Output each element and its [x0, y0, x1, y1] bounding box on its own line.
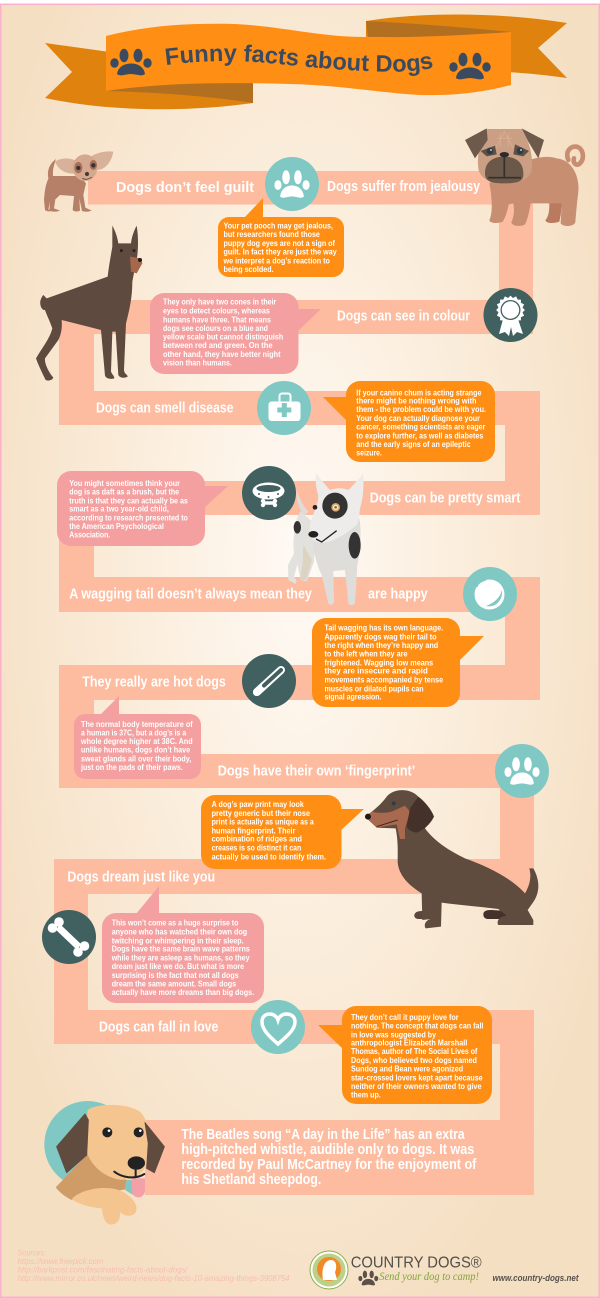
Beatles fact	[181, 1127, 477, 1188]
bubble: hot dogs: just on the pads of their paws.	[80, 763, 183, 772]
dog: doberman	[36, 226, 142, 381]
bubble: guilt: Your pet pooch may get jealous,	[224, 222, 333, 230]
bubble: guilt: being scolded.	[224, 265, 274, 274]
icon: heart badge	[251, 1000, 305, 1054]
bubble: fingerprint: A dog’s paw print may look	[212, 800, 304, 809]
bubble: colour vision: They only have two cones in their	[163, 298, 276, 307]
bubble: fingerprint: human fingerprint. Their	[212, 826, 295, 835]
bubble: smell disease: to explore further, as well as diabetes	[356, 431, 484, 440]
bubble: hot dogs: sweat glands all over their body,	[81, 754, 191, 763]
Beatles fact: his Shetland sheepdog.	[181, 1172, 321, 1188]
bubble: colour vision: other hand, they have better night	[163, 350, 281, 359]
icon: right paw	[449, 53, 491, 79]
bubble: hot dogs: unlike humans, dogs don’t have	[81, 746, 191, 755]
heading: wagging tail: A wagging tail doesn’t always mean they	[69, 586, 312, 602]
dog: puppy portrait	[44, 1101, 164, 1225]
bubble: colour vision: dogs see colours on a blue and	[163, 324, 268, 333]
dog: pug	[465, 128, 583, 226]
bubble: dreams: dream the same amount. Small dogs	[112, 979, 237, 988]
heading: are happy: are happy	[368, 586, 428, 602]
bubble: guilt: puppy dog eyes are not a sign of	[224, 239, 335, 248]
bubble: guilt	[218, 198, 344, 277]
heading: colour: Dogs can see in colour	[337, 308, 470, 324]
dog: chihuahua	[44, 151, 113, 212]
bubble: dreams: anyone who has watched their own dog	[112, 928, 247, 937]
bubble: tail wagging	[312, 618, 484, 707]
icon: left paw	[110, 49, 152, 75]
bubble: dreams: actually have more dreams than big dogs.	[112, 988, 254, 997]
bubble: dreams: while they are asleep as humans, so they	[111, 954, 250, 963]
heading: fingerprint: Dogs have their own ‘fingerprint’	[218, 764, 415, 780]
bubble: love: neither of their owners wanted to give	[351, 1082, 482, 1091]
Beatles fact: high-pitched whistle, audible only to dogs. It was	[181, 1142, 474, 1158]
bubble: fingerprint: creases is so distinct it can	[212, 843, 301, 852]
bubble: colour vision: humans have three. That means	[163, 315, 271, 324]
bubble: dreams: Dogs have the same brain wave patterns	[112, 945, 250, 954]
bubble: hot dogs	[74, 696, 201, 779]
winding path	[54, 171, 540, 1195]
bubble: guilt: guilt. In fact they are just the way	[224, 248, 337, 257]
bubble: dreams: surprising is the fact that not all dogs	[112, 971, 239, 980]
bubble: hot dogs: The normal body temperature of	[81, 720, 193, 729]
bubble: dreams	[102, 886, 264, 1003]
bubble: smell disease: there might be nothing wrong with	[356, 397, 477, 406]
Beatles fact: The Beatles song “A day in the Life” has an extra	[181, 1127, 465, 1143]
bubble: smell disease: seizure.	[356, 449, 382, 458]
bubble: fingerprint: combination of ridges and	[212, 835, 302, 844]
bubble: dreams: This won’t come as a huge surprise to	[112, 919, 239, 928]
bubble: tail wagging: the right when they’re happy and	[324, 641, 438, 650]
bubble: fingerprint: print is actually as unique as a	[212, 818, 314, 827]
logo name: COUNTRY DOGS®	[351, 1254, 482, 1271]
bubble: tail wagging: Apparently dogs wag their tail to	[324, 632, 437, 641]
heading: guilt: Dogs don’t feel guilt	[116, 180, 254, 196]
bubble: colour vision: eyes to detect colours, whereas	[163, 307, 270, 316]
bubble: love: them up.	[351, 1091, 381, 1100]
title: Funny facts about Dogs	[166, 44, 432, 76]
bubble: love: Thomas, author of The Social Lives of	[351, 1047, 478, 1056]
sources: http://barkpost.com/fascinating-facts-about-dogs/	[18, 1264, 189, 1274]
sources: http://www.mirror.co.uk/news/weird-news/dog-facts-10-amazing-things-3908754	[18, 1273, 290, 1283]
bubble: love: Dogs, who believed two dogs named	[351, 1056, 477, 1065]
bubble: dreams: dream just like we do. But what is more	[112, 962, 245, 971]
bubble: love: anthropologist Elizabeth Marshall	[351, 1039, 467, 1048]
bubble: love: nothing. The concept that dogs can fall	[351, 1021, 483, 1030]
icon: paw badge	[495, 744, 549, 798]
bubble: guilt: we interpret a dog’s reaction to	[223, 256, 330, 265]
sources: Sources:	[18, 1248, 46, 1258]
bubble: smart: truth is that they can actually be as	[69, 496, 188, 505]
bubble: dreams: twitching or whimpering in their sleep.	[112, 936, 244, 945]
title banner	[45, 14, 567, 110]
bubble: fingerprint	[201, 795, 364, 869]
icon: paw badge	[265, 157, 319, 211]
bubble: smell disease: If your canine chum is acting strange	[356, 388, 482, 397]
logo: Country Dogs	[310, 1251, 482, 1289]
icon: bone badge	[42, 910, 96, 964]
bubble: tail wagging: muscles or dilated pupils can	[324, 684, 424, 693]
dog: dachshund	[365, 790, 538, 928]
bubble: love: They don’t call it puppy love for	[351, 1013, 458, 1022]
heading: smart: Dogs can be pretty smart	[370, 490, 521, 506]
bubble: colour vision: between red and green. On the	[163, 341, 273, 350]
bubble: love	[318, 1006, 492, 1104]
logo badge	[310, 1251, 348, 1289]
bubble: smell disease: and the early signs of an epileptic	[356, 440, 471, 449]
icon: ball badge	[463, 567, 517, 621]
bubble: colour vision: yellow scale but cannot distinguish	[163, 333, 283, 342]
bubble: colour vision: vision than humans.	[163, 359, 232, 368]
bubble: tail wagging: they are insecure and rapid	[324, 667, 428, 676]
icon: rosette badge	[484, 288, 538, 342]
bubble: smell disease: them - the problem could be with you.	[356, 405, 486, 414]
heading: love: Dogs can fall in love	[99, 1020, 218, 1036]
heading: disease: Dogs can smell disease	[96, 400, 233, 416]
bubble: fingerprint: actually be used to identify them.	[212, 852, 326, 861]
bubble: smell disease: Your dog can actually diagnose your	[356, 414, 480, 423]
website: www.country-dogs.net	[492, 1273, 579, 1283]
bubble: tail wagging: frightened. Wagging low means	[324, 658, 434, 667]
bubble: tail wagging: to the left when they are	[324, 649, 408, 658]
sources: https://www.freepick.com	[18, 1256, 103, 1266]
bubble: smart: smart as a two year-old child,	[69, 505, 169, 514]
bubble: love: Sundog and Bean were agonized	[351, 1065, 463, 1074]
icon: thermometer badge	[242, 654, 296, 708]
bubble: love: in love was suggested by	[351, 1030, 437, 1039]
bubble: fingerprint: pretty generic but their nose	[212, 809, 311, 818]
bubble: hot dogs: whole degree higher at 38C. And	[80, 737, 193, 746]
bubble: smart: the American Psychological	[69, 522, 164, 531]
Beatles fact: recorded by Paul McCartney for the enjoyment of	[181, 1157, 477, 1173]
heading: hot dogs: They really are hot dogs	[82, 675, 226, 691]
bubble: tail wagging: signal agression.	[324, 693, 382, 702]
bubble: love: star-crossed lovers kept apart because	[351, 1074, 483, 1083]
bubble: guilt: but researchers found those	[224, 230, 320, 239]
bubble: colour vision	[150, 293, 321, 374]
logo tagline: Send your dog to camp!	[379, 1271, 479, 1283]
bubble: tail wagging: Tail wagging has its own language.	[324, 623, 443, 632]
icon: collar badge	[242, 466, 296, 520]
bubble: smart: You might sometimes think your	[69, 479, 180, 488]
bubble: smart: Association.	[69, 531, 110, 540]
heading: jealousy: Dogs suffer from jealousy	[327, 179, 480, 195]
icon: logo paw	[358, 1271, 378, 1285]
bubble: smell disease: cancer, something scientists are eager	[356, 423, 485, 432]
bubble: smell disease	[323, 381, 495, 462]
bubble: tail wagging: movements accompanied by tense	[324, 676, 444, 685]
dog: spotted terrier	[288, 473, 364, 605]
bubble: hot dogs: a human is 37C, but a dog’s is a	[81, 729, 187, 738]
sources	[18, 1248, 290, 1283]
icon: medical kit badge	[257, 381, 311, 435]
bubble: smart: according to research presented to	[69, 513, 188, 522]
bubble: smart	[57, 471, 228, 546]
bubble: smart: dog is as daft as a brush, but the	[69, 487, 180, 496]
heading: dream: Dogs dream just like you	[67, 870, 215, 886]
